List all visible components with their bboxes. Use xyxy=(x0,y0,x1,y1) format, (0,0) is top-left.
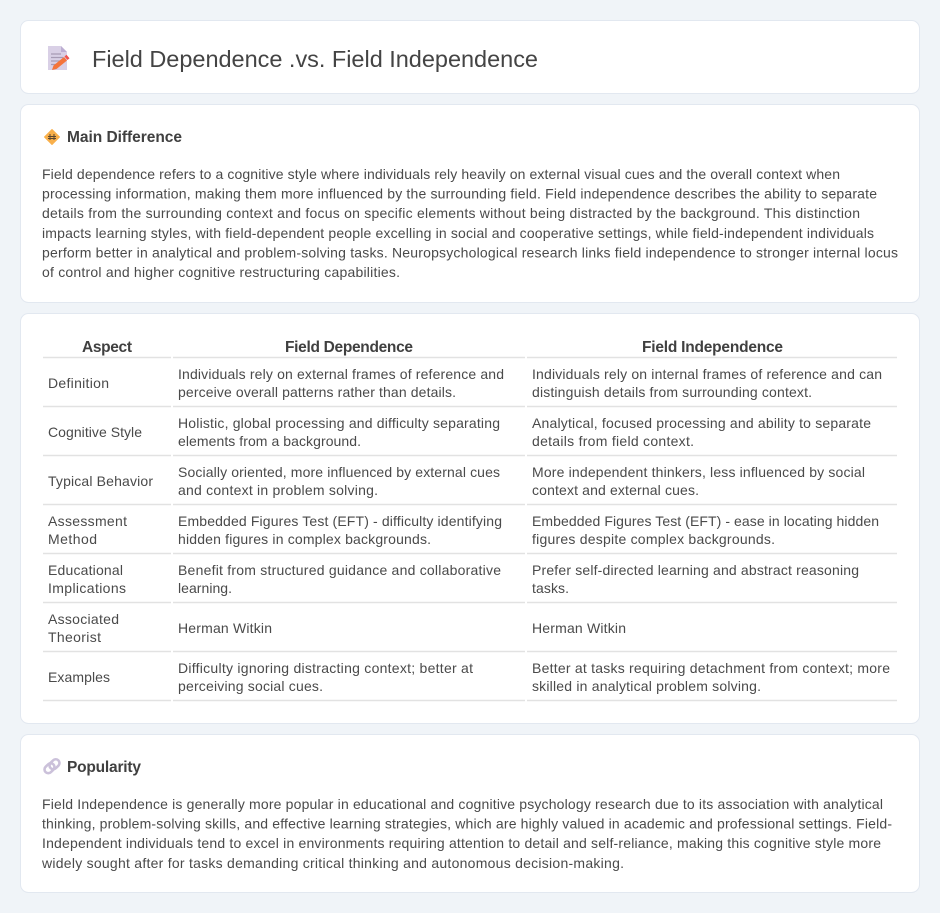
row: definition: distinguish details from surrounding context. xyxy=(532,384,812,400)
row: assessment method xyxy=(48,513,879,547)
row: typical behavior: Socially oriented, more influenced by external cues xyxy=(178,464,500,480)
text block: popularity: widely sought after for tasks demanding critical thinking and autonomous decision-making. xyxy=(41,855,624,871)
row: cognitive style: Cognitive Style xyxy=(48,424,142,440)
table header: Field Independence xyxy=(642,339,783,356)
heading: popularity: Popularity xyxy=(67,759,141,776)
row: cognitive style: Holistic, global processing and difficulty separating xyxy=(178,415,500,431)
row: educational implications: Implications xyxy=(48,580,126,596)
row: typical behavior xyxy=(48,464,865,498)
heading: main difference: Main Difference xyxy=(67,129,182,146)
row: definition: Definition xyxy=(48,375,109,391)
text block: main difference: details from the surrounding context and focus on specific elements without being distracted by the background. This distinction xyxy=(42,205,860,221)
row: associated theorist: Theorist xyxy=(48,629,101,645)
text block: main difference: processing information, making them more influenced by the surrounding field. Field independence describes the ability to separate xyxy=(42,186,877,202)
row: definition: perceive overall patterns rather than details. xyxy=(178,384,456,400)
row: examples: Examples xyxy=(48,669,110,685)
text block: main difference: Field dependence refers to a cognitive style where individuals rely heavily on external visual cues and the overall context when xyxy=(42,166,840,182)
row: typical behavior: More independent thinkers, less influenced by social xyxy=(532,464,865,480)
icon: link xyxy=(43,758,61,775)
panel: popularity xyxy=(20,734,920,892)
text block: popularity: Independent individuals tend to excel in environments requiring attention to detail and self-reliance, making this cognitive style more xyxy=(42,835,881,851)
row: assessment method: figures despite complex backgrounds. xyxy=(532,531,775,547)
row: educational implications xyxy=(48,562,859,596)
row: examples xyxy=(48,660,890,694)
row: assessment method: Embedded Figures Test (EFT) - ease in locating hidden xyxy=(532,513,879,529)
row: cognitive style xyxy=(48,415,871,449)
panel: main difference xyxy=(20,104,920,302)
text block: popularity xyxy=(41,796,892,871)
row: assessment method: hidden figures in complex backgrounds. xyxy=(178,531,431,547)
row: educational implications: Benefit from structured guidance and collaborative xyxy=(178,562,501,578)
row: assessment method: Embedded Figures Test (EFT) - difficulty identifying xyxy=(178,513,502,529)
table header: Aspect xyxy=(82,339,132,356)
icon: document with pencil xyxy=(48,46,70,70)
row: cognitive style: details from field context. xyxy=(532,433,694,449)
text block: main difference: perform better in analytical and problem-solving tasks. Neuropsychological research links field independence to stronger internal locus xyxy=(42,244,898,260)
row: definition: Individuals rely on internal frames of reference and can xyxy=(532,366,882,382)
row: examples: skilled in analytical problem solving. xyxy=(532,678,761,694)
text block: main difference xyxy=(42,166,898,280)
panel: comparison table xyxy=(20,314,920,724)
row: assessment method: Method xyxy=(48,531,97,547)
row: educational implications: tasks. xyxy=(532,580,569,596)
text block: main difference: impacts learning styles, with field-dependent people excelling in social and cooperative settings, while field-independent individuals xyxy=(42,225,874,241)
row: typical behavior: context and external cues. xyxy=(532,482,699,498)
row: educational implications: Prefer self-directed learning and abstract reasoning xyxy=(532,562,859,578)
row: associated theorist: Associated xyxy=(48,611,119,627)
row: associated theorist xyxy=(48,611,626,645)
row: associated theorist: Herman Witkin xyxy=(178,620,272,636)
row: educational implications: Educational xyxy=(48,562,123,578)
row: cognitive style: Analytical, focused processing and ability to separate xyxy=(532,415,871,431)
title: Field Dependence .vs. Field Independence xyxy=(92,46,538,72)
text block: popularity: thinking, problem-solving skills, and effective learning strategies, which are highly valued in academic and professional settings. Field- xyxy=(42,816,892,832)
panel: header xyxy=(20,20,920,94)
row: educational implications: learning. xyxy=(178,580,232,596)
row: definition: Individuals rely on external frames of reference and xyxy=(178,366,504,382)
row: examples: Better at tasks requiring detachment from context; more xyxy=(532,660,890,676)
text block: popularity: Field Independence is generally more popular in educational and cognitive psychology research due to its association with analytical xyxy=(42,796,883,812)
row: definition xyxy=(48,366,882,400)
row: typical behavior: Typical Behavior xyxy=(48,473,153,489)
row: typical behavior: and context in problem solving. xyxy=(178,482,378,498)
row: assessment method: Assessment xyxy=(48,513,127,529)
row: examples: perceiving social cues. xyxy=(178,678,323,694)
table header xyxy=(82,339,783,356)
text block: main difference: of control and higher cognitive restructuring capabilities. xyxy=(42,264,400,280)
row: associated theorist: Herman Witkin xyxy=(532,620,626,636)
row: examples: Difficulty ignoring distracting context; better at xyxy=(178,660,473,676)
row: cognitive style: elements from a background. xyxy=(178,433,361,449)
icon: warning diamond xyxy=(44,130,60,144)
table header: Field Dependence xyxy=(285,339,413,356)
